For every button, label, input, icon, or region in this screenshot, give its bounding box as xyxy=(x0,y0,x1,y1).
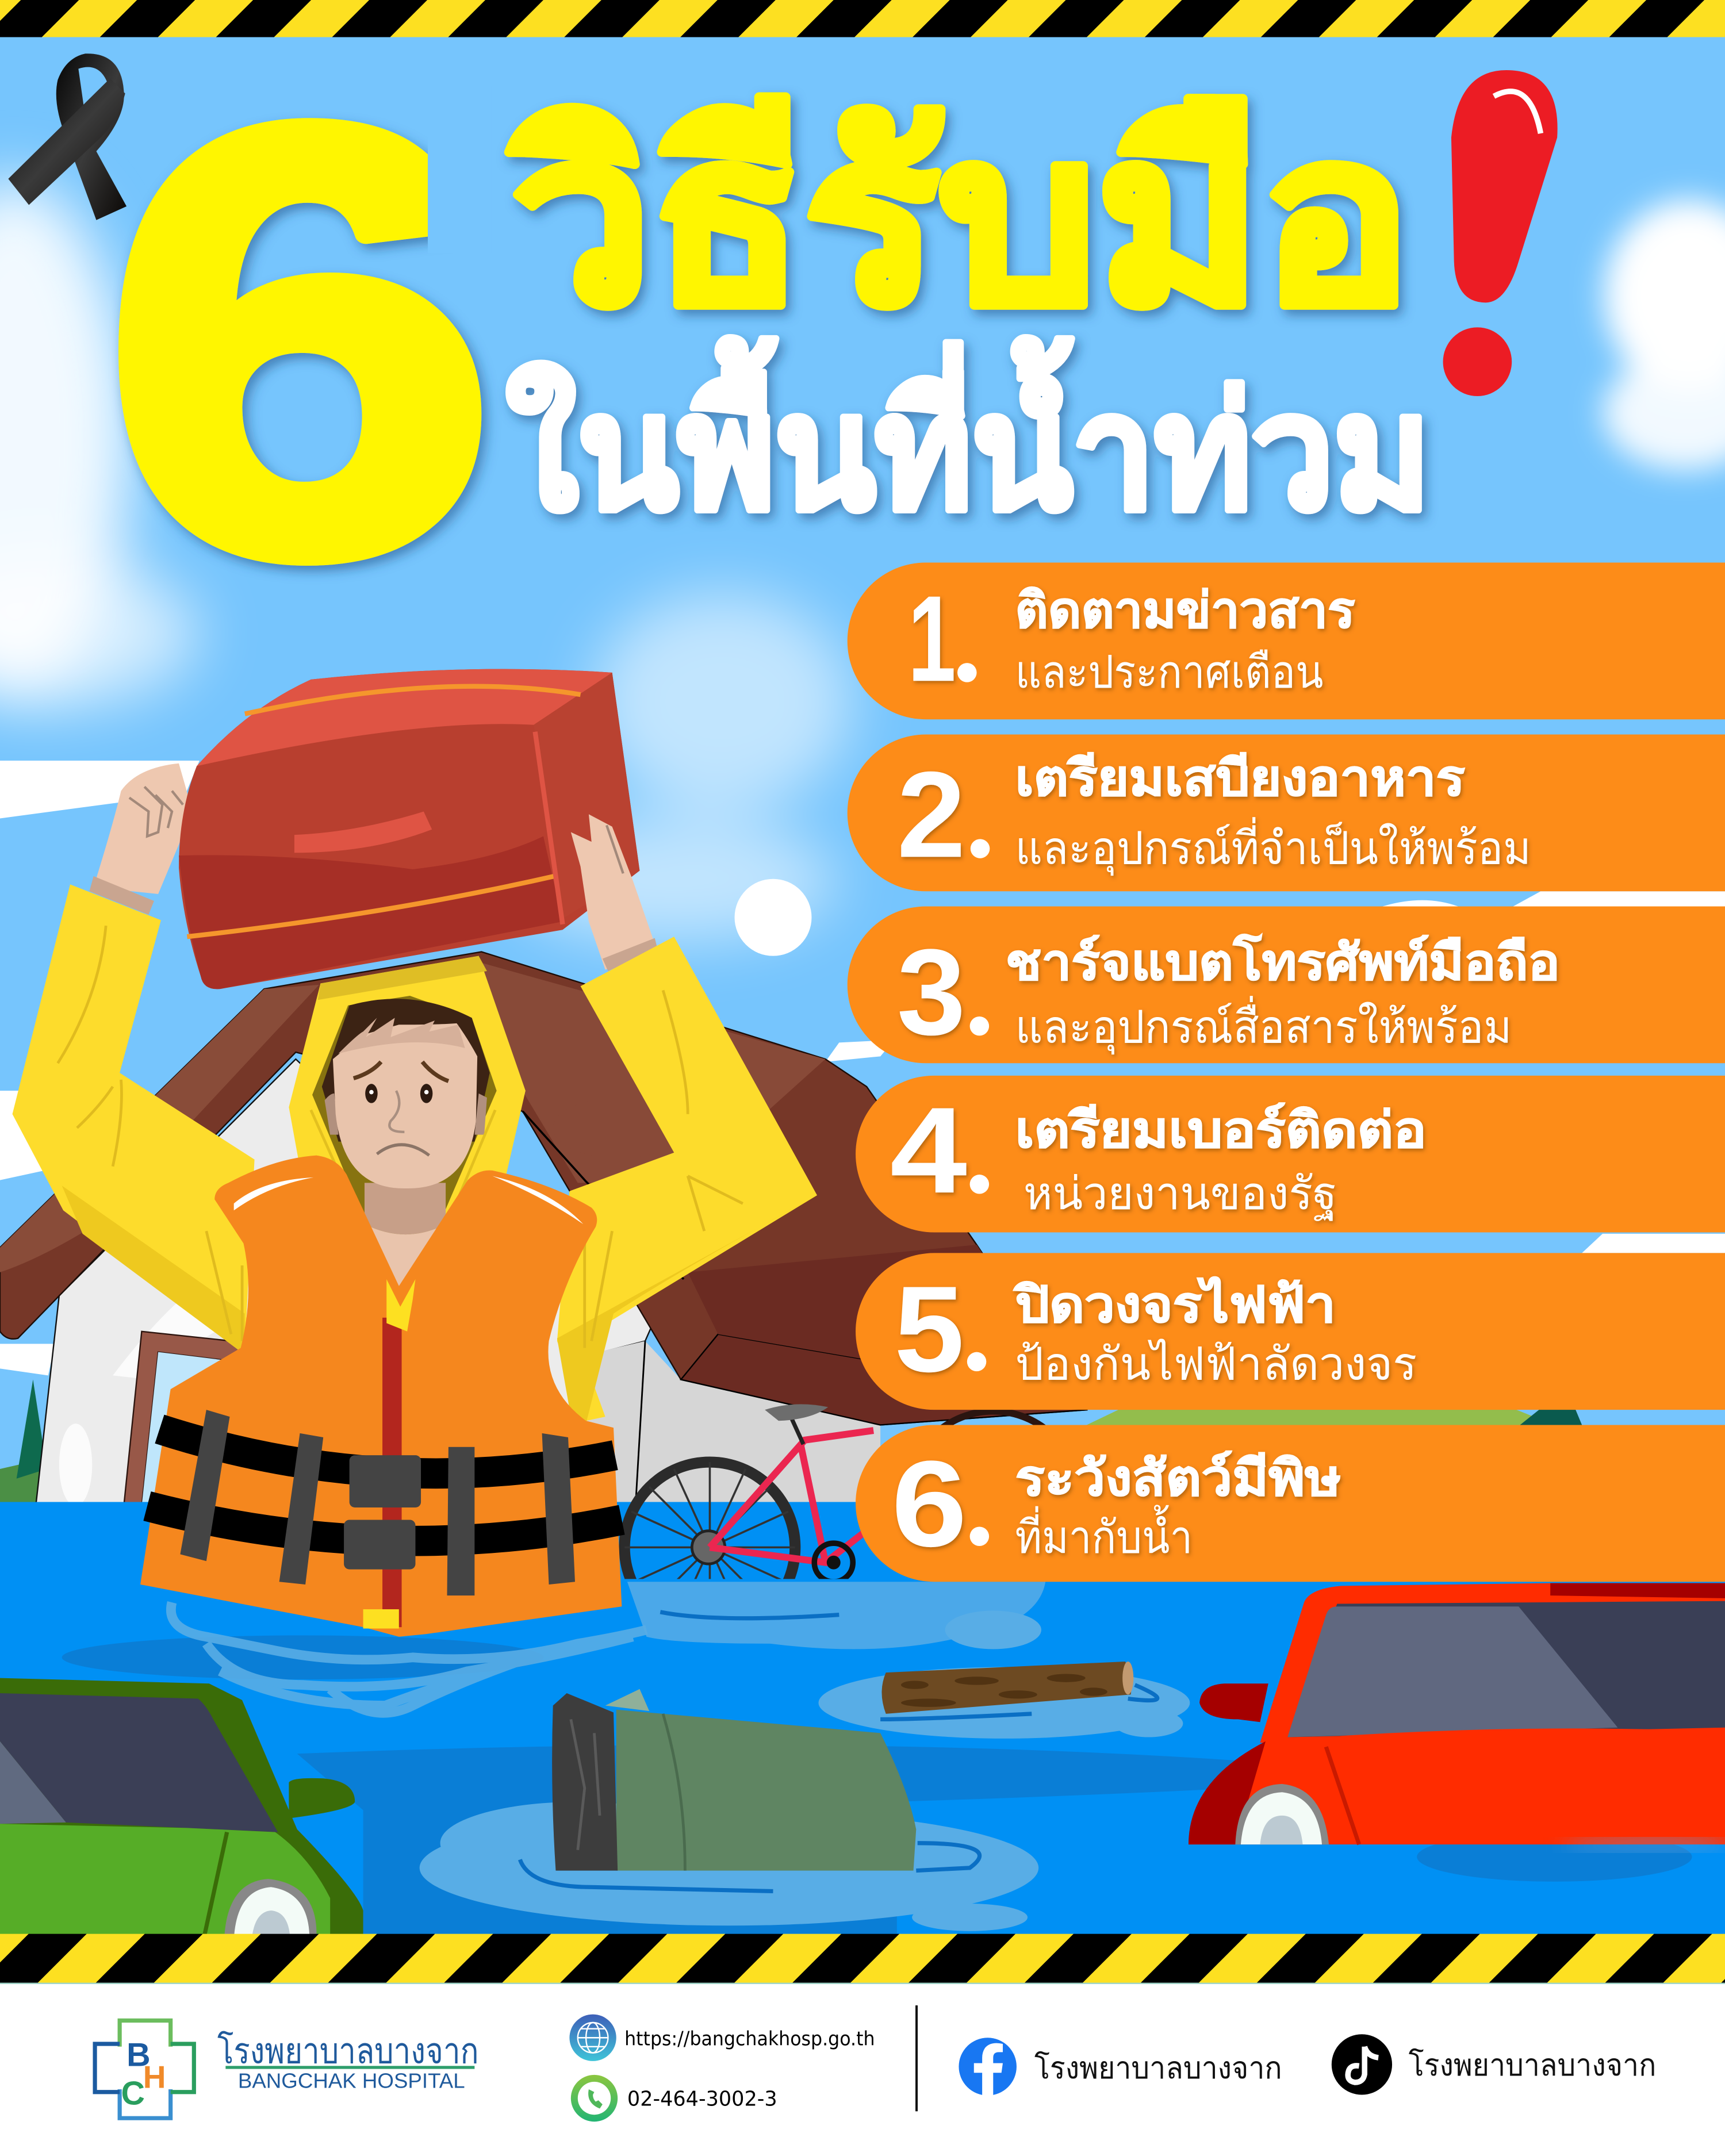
hospital logo cross xyxy=(95,2020,194,2118)
bicycle xyxy=(619,1404,874,1579)
dark water patches xyxy=(62,1635,1692,1934)
hood zipper lines xyxy=(311,1110,495,1307)
footer panel xyxy=(0,1983,1725,2156)
background trees and hill xyxy=(0,1380,1582,1506)
step 5: ป้องกันไฟฟ้าลัดวงจร xyxy=(1015,1338,1417,1390)
door frame xyxy=(124,1332,245,1506)
icon: globe xyxy=(569,2015,616,2061)
step 6: ที่มากับน้ำ xyxy=(1015,1505,1193,1563)
step 4: หน่วยงานของรัฐ xyxy=(1023,1168,1337,1221)
step 1 xyxy=(848,562,1725,719)
main title number 6: 6 xyxy=(104,3,496,679)
title line one: วิธีรับมือ xyxy=(508,87,1412,352)
step 1: 1 xyxy=(908,570,956,707)
right sleeve xyxy=(557,937,817,1424)
raincoat hood xyxy=(289,956,526,1300)
step 3: 3 xyxy=(897,924,965,1061)
step 1: ติดตามข่าวสาร xyxy=(1015,583,1355,638)
right hand xyxy=(571,814,658,971)
title line two: ในพื้นที่น้ำท่วม xyxy=(506,337,1431,542)
left sleeve xyxy=(13,884,255,1355)
log in water xyxy=(881,1662,1133,1714)
step 6 xyxy=(856,1425,1725,1582)
life vest xyxy=(140,1156,622,1637)
left hand xyxy=(90,764,193,915)
hospital logo cross: H xyxy=(143,2059,166,2095)
tiktok name: โรงพยาบาลบางจาก xyxy=(1409,2048,1656,2082)
trash bin floating xyxy=(552,1689,916,1871)
step 3: และอุปกรณ์สื่อสารให้พร้อม xyxy=(1015,996,1512,1054)
step 2: และอุปกรณ์ที่จำเป็นให้พร้อม xyxy=(1015,817,1531,876)
hospital logo cross: B xyxy=(126,2036,151,2073)
wall xyxy=(36,1059,660,1506)
hospital name: BANGCHAK HOSPITAL xyxy=(238,2070,465,2093)
step 2: เตรียมเสบียงอาหาร xyxy=(1015,751,1465,806)
exclamation mark xyxy=(1443,70,1558,396)
step 2: 2 xyxy=(897,746,965,883)
red car xyxy=(1189,1583,1725,1850)
vest black straps xyxy=(147,1429,622,1541)
icon: facebook xyxy=(959,2038,1017,2096)
icon: phone xyxy=(571,2075,618,2122)
green car xyxy=(0,1678,363,1939)
icon: tiktok xyxy=(1332,2034,1392,2095)
vest grey webbing xyxy=(180,1410,575,1595)
step 4: เตรียมเบอร์ติดต่อ xyxy=(1015,1103,1427,1158)
flood water xyxy=(0,1502,1725,1942)
hospital logo cross: C xyxy=(121,2075,145,2112)
step 1: และประกาศเตือน xyxy=(1015,647,1323,697)
step 6: 6 xyxy=(891,1436,967,1572)
house xyxy=(0,952,1087,1506)
step 4: 4 xyxy=(890,1082,967,1219)
step 6: ระวังสัตว์มีพิษ xyxy=(1015,1451,1341,1506)
step 5 xyxy=(856,1253,1725,1410)
step 3 xyxy=(848,907,1725,1063)
bicycle frame xyxy=(710,1430,880,1563)
hospital name: โรงพยาบาลบางจาก xyxy=(217,2031,479,2071)
step 3: ชาร์จแบตโทรศัพท์มือถือ xyxy=(1006,933,1560,990)
step 2 xyxy=(848,735,1725,891)
black mourning ribbon xyxy=(8,53,126,220)
background white streaks and moon xyxy=(0,761,1725,1375)
hospital name xyxy=(217,2031,479,2093)
bottom hazard stripe xyxy=(0,1934,1725,1984)
ripples xyxy=(420,1582,1190,1931)
facebook name: โรงพยาบาลบางจาก xyxy=(1034,2051,1282,2085)
bag on head xyxy=(179,669,639,989)
top hazard stripe xyxy=(0,0,1725,37)
rear wheel behind cards xyxy=(941,1410,1045,1425)
head and face xyxy=(322,999,490,1286)
step 5: ปิดวงจรไฟฟ้า xyxy=(1013,1276,1336,1333)
website text: https://bangchakhosp.go.th xyxy=(624,2027,875,2050)
clouds xyxy=(0,179,1725,942)
character in raincoat xyxy=(13,669,817,1637)
divider xyxy=(915,2005,918,2111)
phone number: 02-464-3002-3 xyxy=(627,2088,777,2111)
roof xyxy=(0,952,1087,1425)
ripples around person xyxy=(171,1602,646,1713)
step 5: 5 xyxy=(894,1261,964,1398)
step 4 xyxy=(856,1076,1725,1233)
